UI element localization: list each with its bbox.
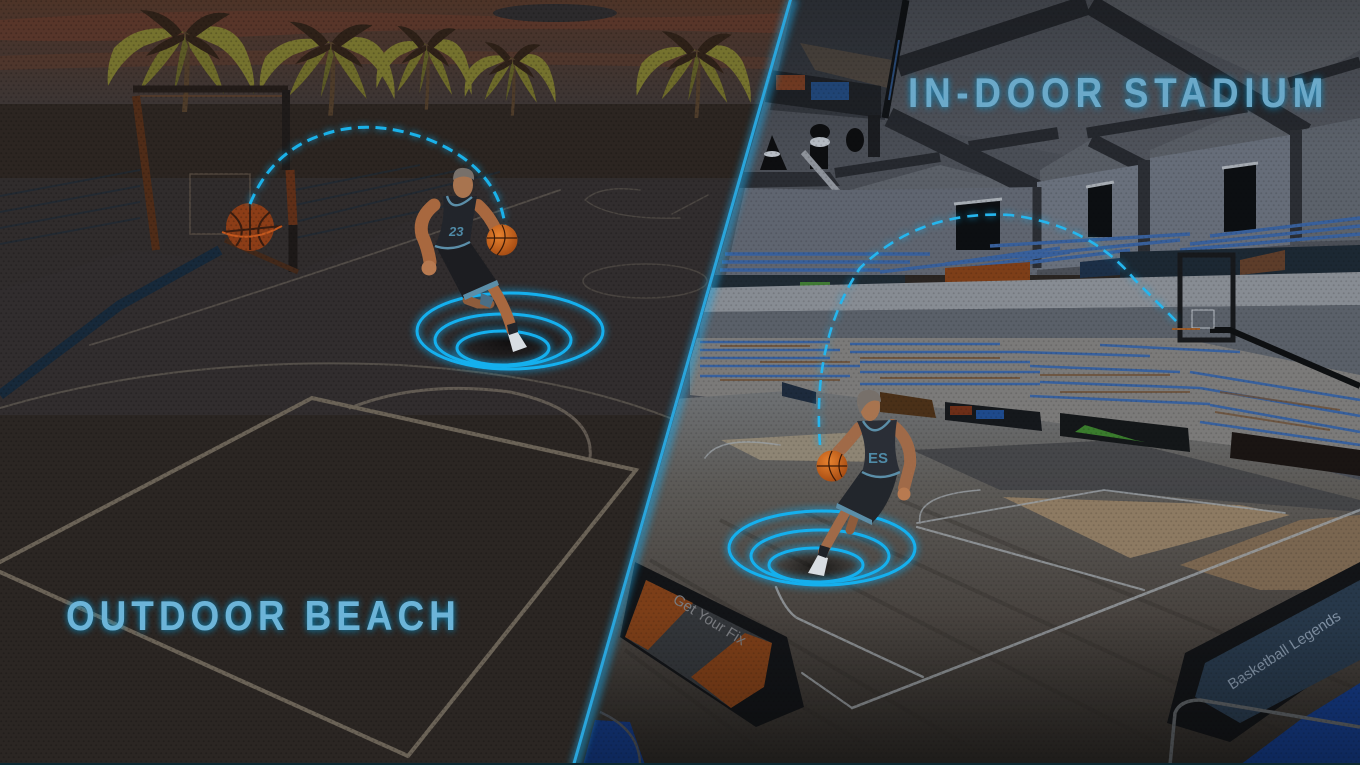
indoor player <box>808 390 910 576</box>
bottom edge strip <box>0 763 1360 765</box>
blue floor corners and rail <box>583 683 1360 765</box>
banner strip <box>712 245 1360 288</box>
wooden planks <box>649 500 1197 623</box>
scoreboard <box>765 0 906 157</box>
arms <box>421 205 434 262</box>
upper seats <box>720 218 1360 272</box>
front leg <box>823 513 845 552</box>
foreground ad board left: Get Your Fix <box>670 591 749 649</box>
sky with sunset clouds <box>0 0 800 106</box>
front leg <box>491 285 512 330</box>
lit paint area <box>1003 497 1290 558</box>
head <box>860 391 880 421</box>
palm trees <box>108 10 751 118</box>
indoor shot arc <box>819 215 1180 445</box>
foreground ad board left <box>620 562 804 727</box>
ad boards <box>782 382 1360 476</box>
indoor target rings <box>729 511 915 585</box>
stadium hoop <box>1172 255 1360 386</box>
outdoor player: 23 <box>448 224 464 239</box>
lower seats <box>690 338 1360 450</box>
ball <box>486 224 518 256</box>
shorts <box>837 470 897 523</box>
jersey <box>857 420 900 477</box>
hoop ball <box>222 203 282 251</box>
panel: in-door stadium <box>570 0 1360 765</box>
back leg <box>467 300 490 304</box>
shorts <box>437 242 498 298</box>
heading: outdoor beach: OUTDOOR BEACH <box>66 593 456 640</box>
panel: outdoor beach <box>0 0 800 765</box>
light rig strut <box>800 150 840 190</box>
indoor player: ES <box>868 450 888 467</box>
seats rows behind hoop <box>0 165 500 244</box>
arms <box>892 425 910 488</box>
blue court edge <box>0 250 220 395</box>
jersey <box>435 196 477 248</box>
foreground court <box>0 415 669 763</box>
foreground ad board right: Basketball Legends <box>1225 608 1344 693</box>
heading: outdoor beach: OUTDOOR BEACH <box>66 593 456 640</box>
ceiling beams <box>835 5 1360 190</box>
spotlights <box>737 124 864 188</box>
dark sea band <box>0 104 800 178</box>
heading: in-door stadium: IN-DOOR STADIUM <box>908 70 1323 117</box>
concourse band <box>700 272 1360 312</box>
foreground ad board right <box>1167 562 1360 742</box>
outdoor target rings <box>417 293 603 369</box>
hoop backboard frame <box>133 89 298 272</box>
arena floor <box>570 390 1360 765</box>
ceiling <box>770 0 1360 200</box>
distant court ground <box>0 180 800 420</box>
back foot <box>850 515 855 530</box>
heading: in-door stadium: IN-DOOR STADIUM <box>908 70 1323 117</box>
upper wall <box>725 118 1360 278</box>
court lines <box>0 189 708 756</box>
floor shadows <box>912 440 1360 512</box>
court lines <box>705 442 1360 708</box>
outdoor player <box>421 168 527 352</box>
outdoor shot arc <box>250 127 505 226</box>
head <box>453 172 473 198</box>
ball <box>816 450 848 482</box>
divider: glowing diagonal line <box>573 0 793 765</box>
